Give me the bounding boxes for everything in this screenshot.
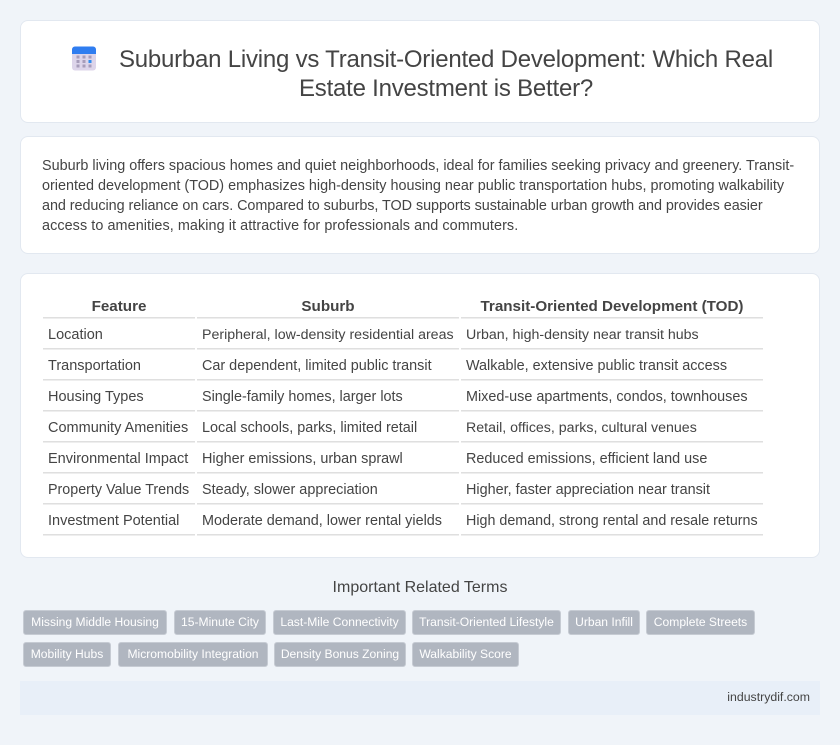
tag: Walkability Score <box>419 647 512 661</box>
title: Estate Investment is Better? <box>299 75 593 102</box>
row: Transportation: Transportation <box>48 358 141 374</box>
row: Housing Types: Housing Types <box>48 389 144 405</box>
comparison table: Car dependent, limited public transit <box>202 358 432 374</box>
footer bar <box>20 681 820 715</box>
related terms heading: Important Related Terms <box>333 579 507 596</box>
comparison table: Peripheral, low-density residential areas <box>202 327 454 343</box>
comparison table: Higher emissions, urban sprawl <box>202 451 403 467</box>
tag: Density Bonus Zoning <box>281 647 399 661</box>
header: Feature: Feature <box>92 298 146 315</box>
row: Investment Potential: Investment Potential <box>48 513 179 529</box>
tags <box>23 610 755 667</box>
intro text: oriented development (TOD) emphasizes high-density housing near public transportation hubs, promoting walkability <box>42 178 784 194</box>
comparison table: Mixed-use apartments, condos, townhouses <box>466 389 748 405</box>
comparison table: Local schools, parks, limited retail <box>202 420 417 436</box>
intro text: and reducing reliance on cars. Compared to suburbs, TOD supports sustainable urban growth and provides easier <box>42 198 763 214</box>
tag <box>273 610 406 635</box>
tag <box>412 610 561 635</box>
tag <box>118 642 268 667</box>
tag: Last-Mile Connectivity <box>280 615 399 629</box>
comparison table: Single-family homes, larger lots <box>202 389 403 405</box>
comparison table: Walkable, extensive public transit access <box>466 358 727 374</box>
footer credit: industrydif.com <box>727 690 810 704</box>
header: TOD: Transit-Oriented Development (TOD) <box>480 298 744 315</box>
tag: 15-Minute City <box>181 615 259 629</box>
tag <box>412 642 519 667</box>
intro text: access to amenities, making it attractive for professionals and commuters. <box>42 218 518 234</box>
comparison table: Steady, slower appreciation <box>202 482 378 498</box>
comparison table: Urban, high-density near transit hubs <box>466 327 699 343</box>
header: Suburb: Suburb <box>301 298 355 315</box>
table panel <box>20 273 820 558</box>
tag: Urban Infill <box>575 615 633 629</box>
comparison table: Higher, faster appreciation near transit <box>466 482 710 498</box>
comparison table: High demand, strong rental and resale returns <box>466 513 758 529</box>
tag <box>274 642 406 667</box>
intro text <box>42 158 794 234</box>
comparison table: Moderate demand, lower rental yields <box>202 513 442 529</box>
icon: calendar <box>72 46 96 70</box>
tag <box>23 642 111 667</box>
comparison table: Reduced emissions, efficient land use <box>466 451 707 467</box>
tag: Mobility Hubs <box>31 647 103 661</box>
tag <box>23 610 167 635</box>
tag: Micromobility Integration <box>127 647 259 661</box>
comparison table: Retail, offices, parks, cultural venues <box>466 420 697 436</box>
tag: Missing Middle Housing <box>31 615 159 629</box>
intro text: Suburb living offers spacious homes and quiet neighborhoods, ideal for families seeking privacy and greenery. Transit- <box>42 158 794 174</box>
tag <box>646 610 755 635</box>
row: Location: Location <box>48 327 103 343</box>
row: Property Value Trends: Property Value Trends <box>48 482 189 498</box>
tag: Transit-Oriented Lifestyle <box>419 615 554 629</box>
row: Community Amenities: Community Amenities <box>48 420 188 436</box>
tag <box>568 610 640 635</box>
tag <box>174 610 266 635</box>
header panel <box>20 20 820 123</box>
row: Environmental Impact: Environmental Impact <box>48 451 188 467</box>
intro panel <box>20 136 820 254</box>
tag: Complete Streets <box>654 615 747 629</box>
title: Suburban Living vs Transit-Oriented Development: Which Real <box>119 46 773 73</box>
title <box>119 46 773 102</box>
